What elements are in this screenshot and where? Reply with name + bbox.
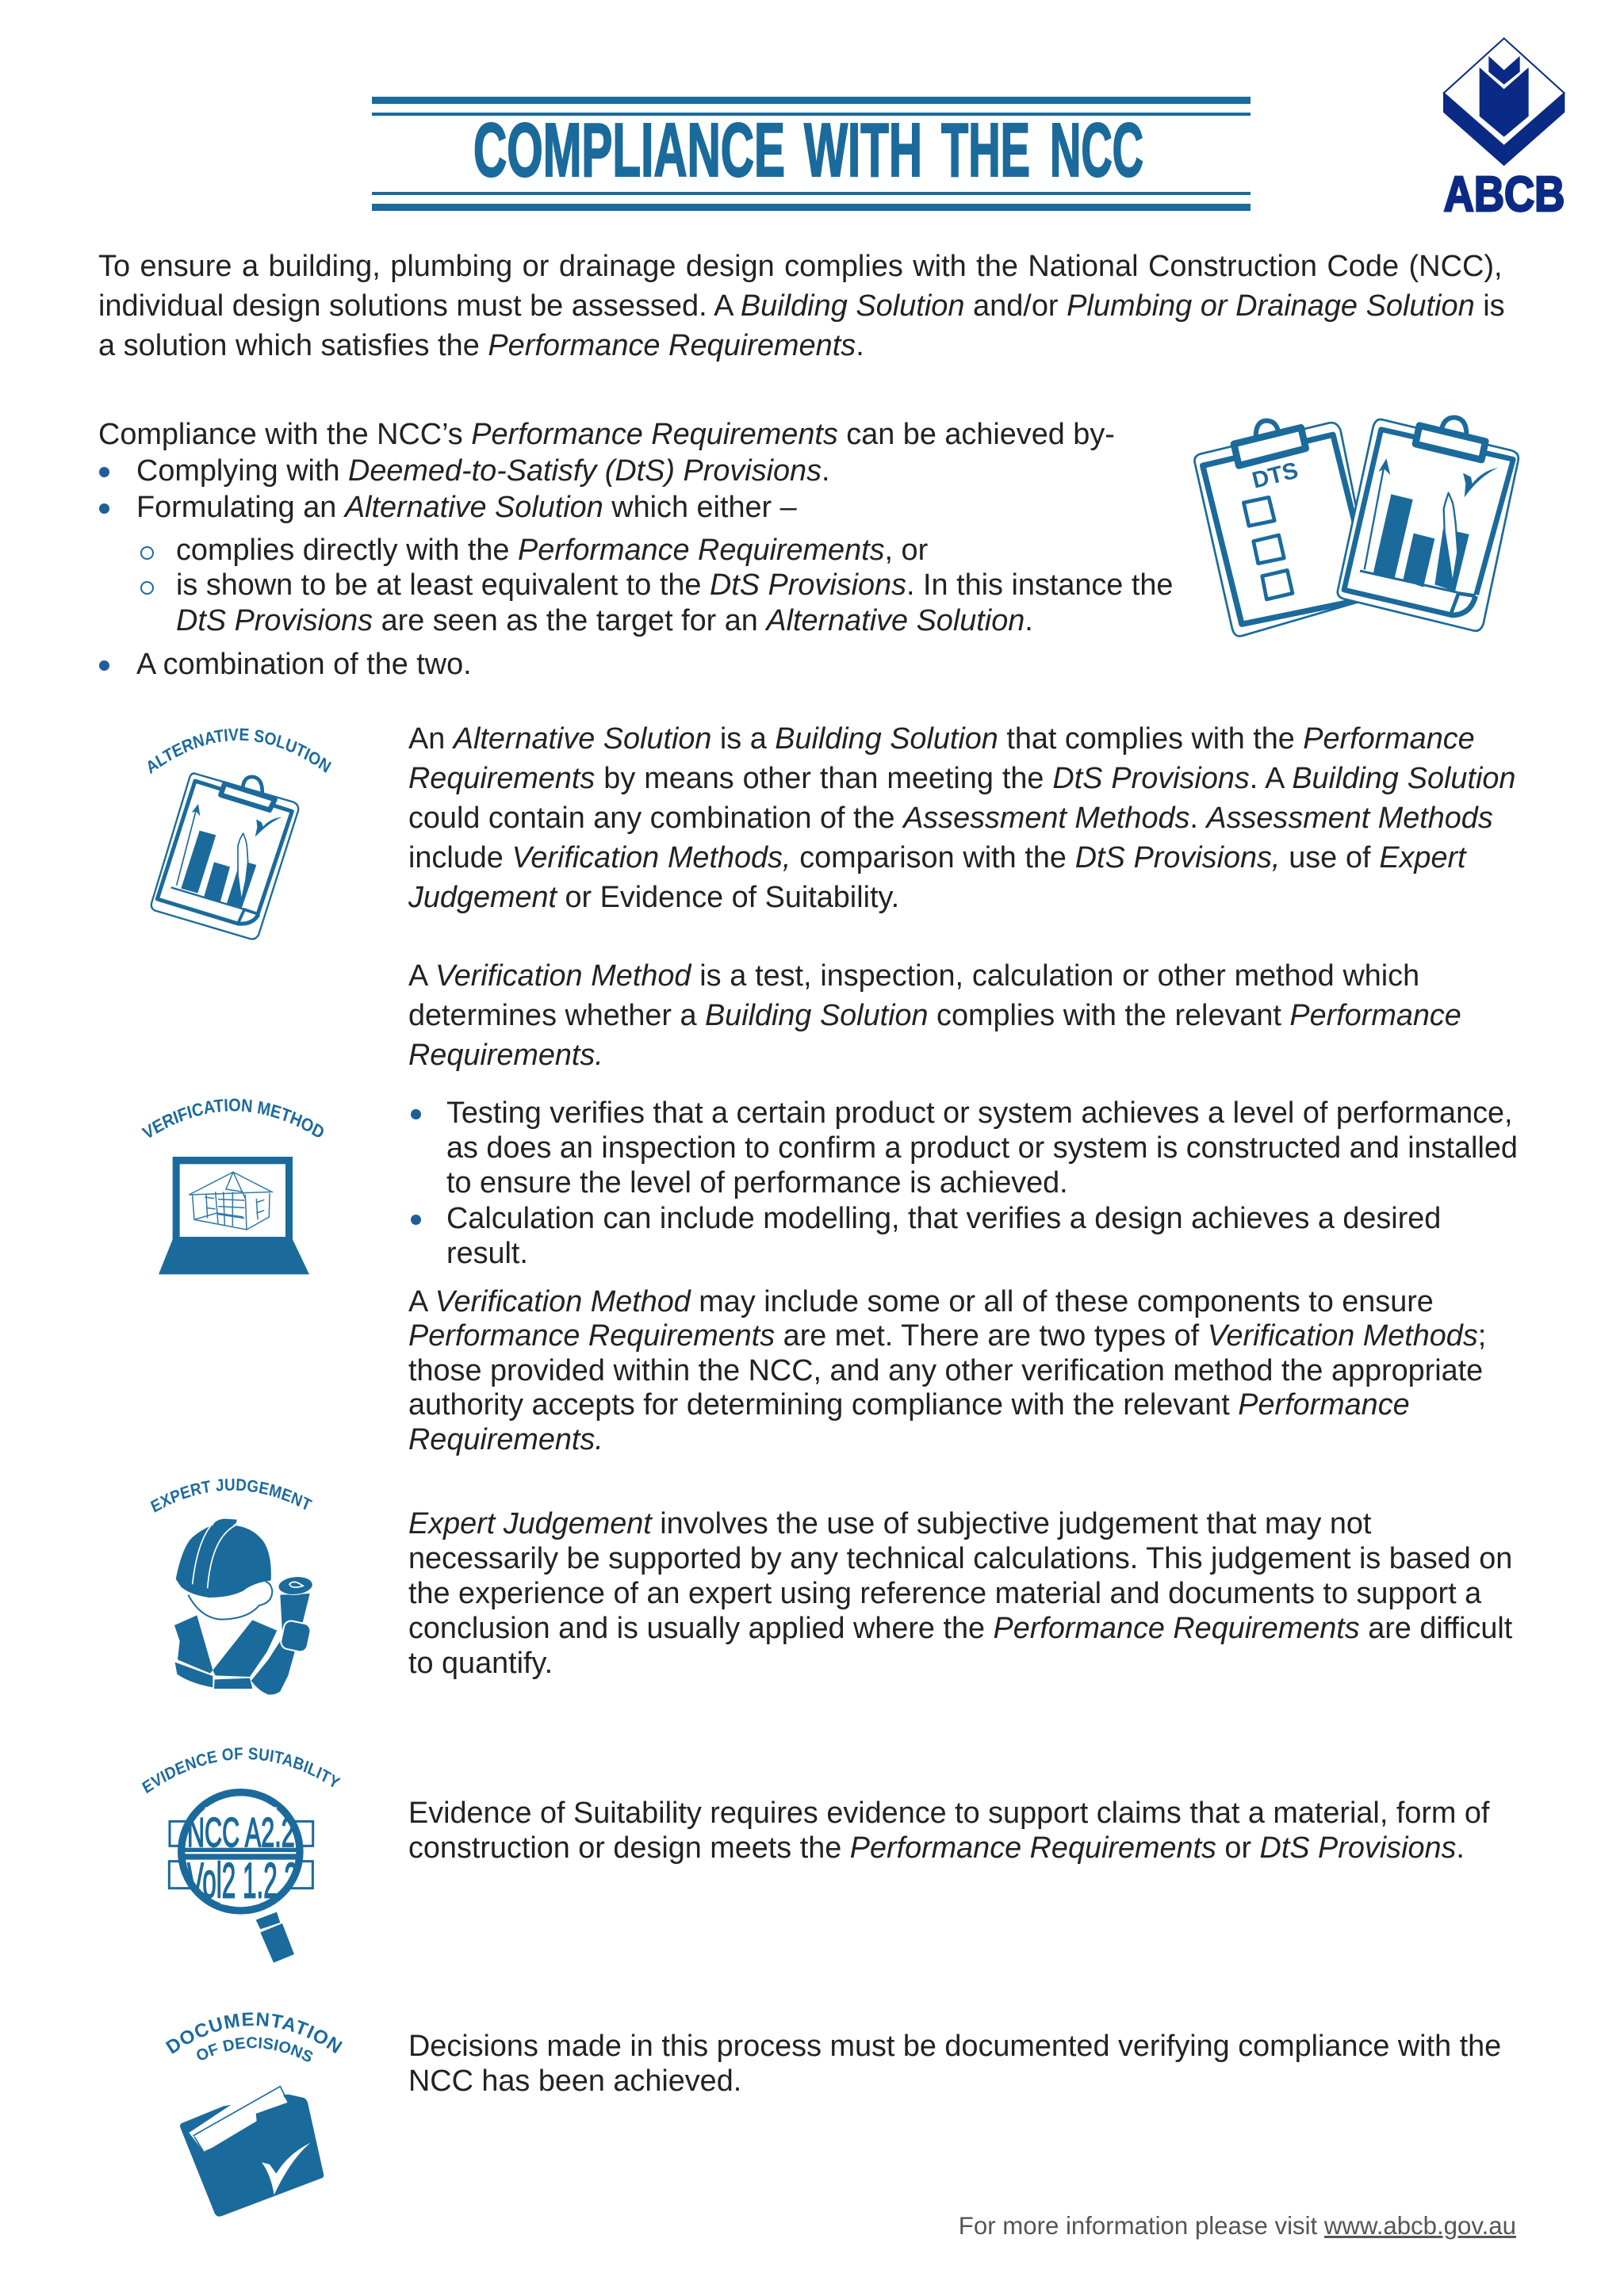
verification methods explanation: A Verification Method may include some or all of these components to ensure [408,1285,1434,1318]
documentation paragraph: NCC has been achieved. [408,2064,741,2098]
label: of decisions: OF DECISIONS [197,2037,312,2061]
expert judgement paragraph: to quantify. [408,1647,553,1680]
title banner: WITH [804,108,922,193]
icon: expert judgement [151,1479,312,1695]
icon: alternative solution [147,728,331,940]
icon: documentation of decisions [165,2012,343,2217]
expert judgement paragraph: conclusion and is usually applied where the Performance Requirements are difficult [408,1612,1512,1645]
clipboard [151,774,298,939]
label: verification method: VERIFICATION METHOD [141,1099,324,1138]
magnifier handle [256,1912,280,1929]
alternative solution paragraph: Judgement or Evidence of Suitability. [408,881,899,914]
verification bullet list: as does an inspection to confirm a product or system is constructed and installed [446,1131,1518,1165]
compliance pathways list [98,418,1173,681]
magnifier lens [182,1793,300,1911]
documentation paragraph [408,2030,1501,2098]
intro paragraph: To ensure a building, plumbing or drainage design complies with the National Construction Code (NCC), [98,250,1503,283]
alternative solution paragraph: An Alternative Solution is a Building Solution that complies with the Performance [408,722,1475,756]
ABCB logo [1442,37,1565,222]
verification method definition: A Verification Method is a test, inspection, calculation or other method which [408,959,1419,993]
title banner: THE [941,108,1030,193]
icon: evidence of suitability: NCC A2.2 [187,1810,295,1856]
verification methods explanation: authority accepts for determining compliance with the relevant Performance [408,1388,1410,1422]
compliance pathways list: Formulating an Alternative Solution which either – [136,491,797,524]
compliance pathways list: A combination of the two. [136,648,472,681]
icon: alternative clipboard [1338,418,1519,631]
intro paragraph: individual design solutions must be assessed. A Building Solution and/or Plumbing or Drainage Solution is [98,289,1505,323]
alternative solution paragraph: include Verification Methods, comparison with the DtS Provisions, use of Expert [408,841,1466,874]
icon: DTS clipboard: DTS [1250,457,1300,494]
label: evidence of suitability: EVIDENCE OF SUITABILITY [141,1747,341,1793]
verification bullet list: Calculation can include modelling, that verifies a design achieves a desired [446,1202,1441,1235]
verification methods explanation: Requirements. [408,1423,603,1456]
folder [180,2095,324,2217]
expert judgement paragraph: necessarily be supported by any technical calculations. This judgement is based on [408,1542,1512,1575]
document tabs [170,1821,313,1846]
compliance pathways list: Compliance with the NCC’s Performance Requirements can be achieved by- [98,418,1115,451]
documentation paragraph: Decisions made in this process must be documented verifying compliance with the [408,2030,1501,2063]
alternative solution paragraph [408,722,1515,914]
title banner: COMPLIANCE [473,108,785,193]
icon: DTS and alternative clipboards [1193,415,1519,637]
alternative solution paragraph: Requirements by means other than meeting the DtS Provisions. A Building Solution [408,762,1515,795]
verification bullet list [411,1096,1518,1270]
verification bullet list: to ensure the level of performance is achieved. [446,1166,1068,1200]
evidence of suitability paragraph: Evidence of Suitability requires evidence to support claims that a material, form of [408,1797,1489,1830]
verification bullet list: Testing verifies that a certain product or system achieves a level of performance, [446,1096,1513,1130]
intro paragraph [98,250,1505,362]
icon: evidence of suitability [141,1747,341,1963]
verification methods explanation: Performance Requirements are met. There are two types of Verification Methods; [408,1319,1486,1353]
alternative solution paragraph: could contain any combination of the Assessment Methods. Assessment Methods [408,802,1493,835]
expert judgement paragraph [408,1507,1512,1680]
logo wordmark: ABCB [1444,167,1565,222]
verification method definition: Requirements. [408,1039,603,1072]
label: alternative solution: ALTERNATIVE SOLUTION [147,728,331,774]
face outline [188,1582,272,1620]
verification method definition [408,959,1461,1072]
verification methods explanation: those provided within the NCC, and any other verification method the appropriate [408,1354,1483,1387]
icon: verification method [141,1099,324,1275]
compliance pathways list: is shown to be at least equivalent to the DtS Provisions. In this instance the [176,568,1173,602]
expert judgement paragraph: Expert Judgement involves the use of subjective judgement that may not [408,1507,1371,1540]
title banner [372,97,1251,211]
hard hat [176,1519,271,1598]
house wireframe [189,1172,272,1230]
papers [189,2079,288,2152]
evidence of suitability paragraph: construction or design meets the Performance Requirements or DtS Provisions. [408,1831,1465,1865]
expert judgement paragraph: the experience of an expert using reference material and documents to support a [408,1577,1481,1610]
footer link: For more information please visit www.abcb.gov.au [959,2212,1516,2240]
icon: evidence of suitability: Vol2 1.2.3 [187,1853,298,1908]
verification method definition: determines whether a Building Solution complies with the relevant Performance [408,999,1461,1032]
compliance pathways list: complies directly with the Performance Requirements, or [176,534,928,567]
laptop [159,1157,309,1274]
label: documentation: DOCUMENTATION [165,2012,343,2054]
verification bullet list: result. [446,1237,528,1270]
label: expert judgement: EXPERT JUDGEMENT [151,1479,312,1513]
evidence of suitability paragraph [408,1797,1489,1865]
compliance pathways list: Complying with Deemed-to-Satisfy (DtS) Provisions. [136,454,830,488]
intro paragraph: a solution which satisfies the Performance Requirements. [98,329,864,362]
logo diamond [1443,38,1565,166]
verification methods explanation [408,1285,1486,1456]
body [174,1575,313,1695]
icon: DTS clipboard [1194,421,1374,636]
compliance pathways list: DtS Provisions are seen as the target for an Alternative Solution. [176,604,1033,637]
title banner: NCC [1050,108,1143,193]
tick [262,2143,311,2195]
